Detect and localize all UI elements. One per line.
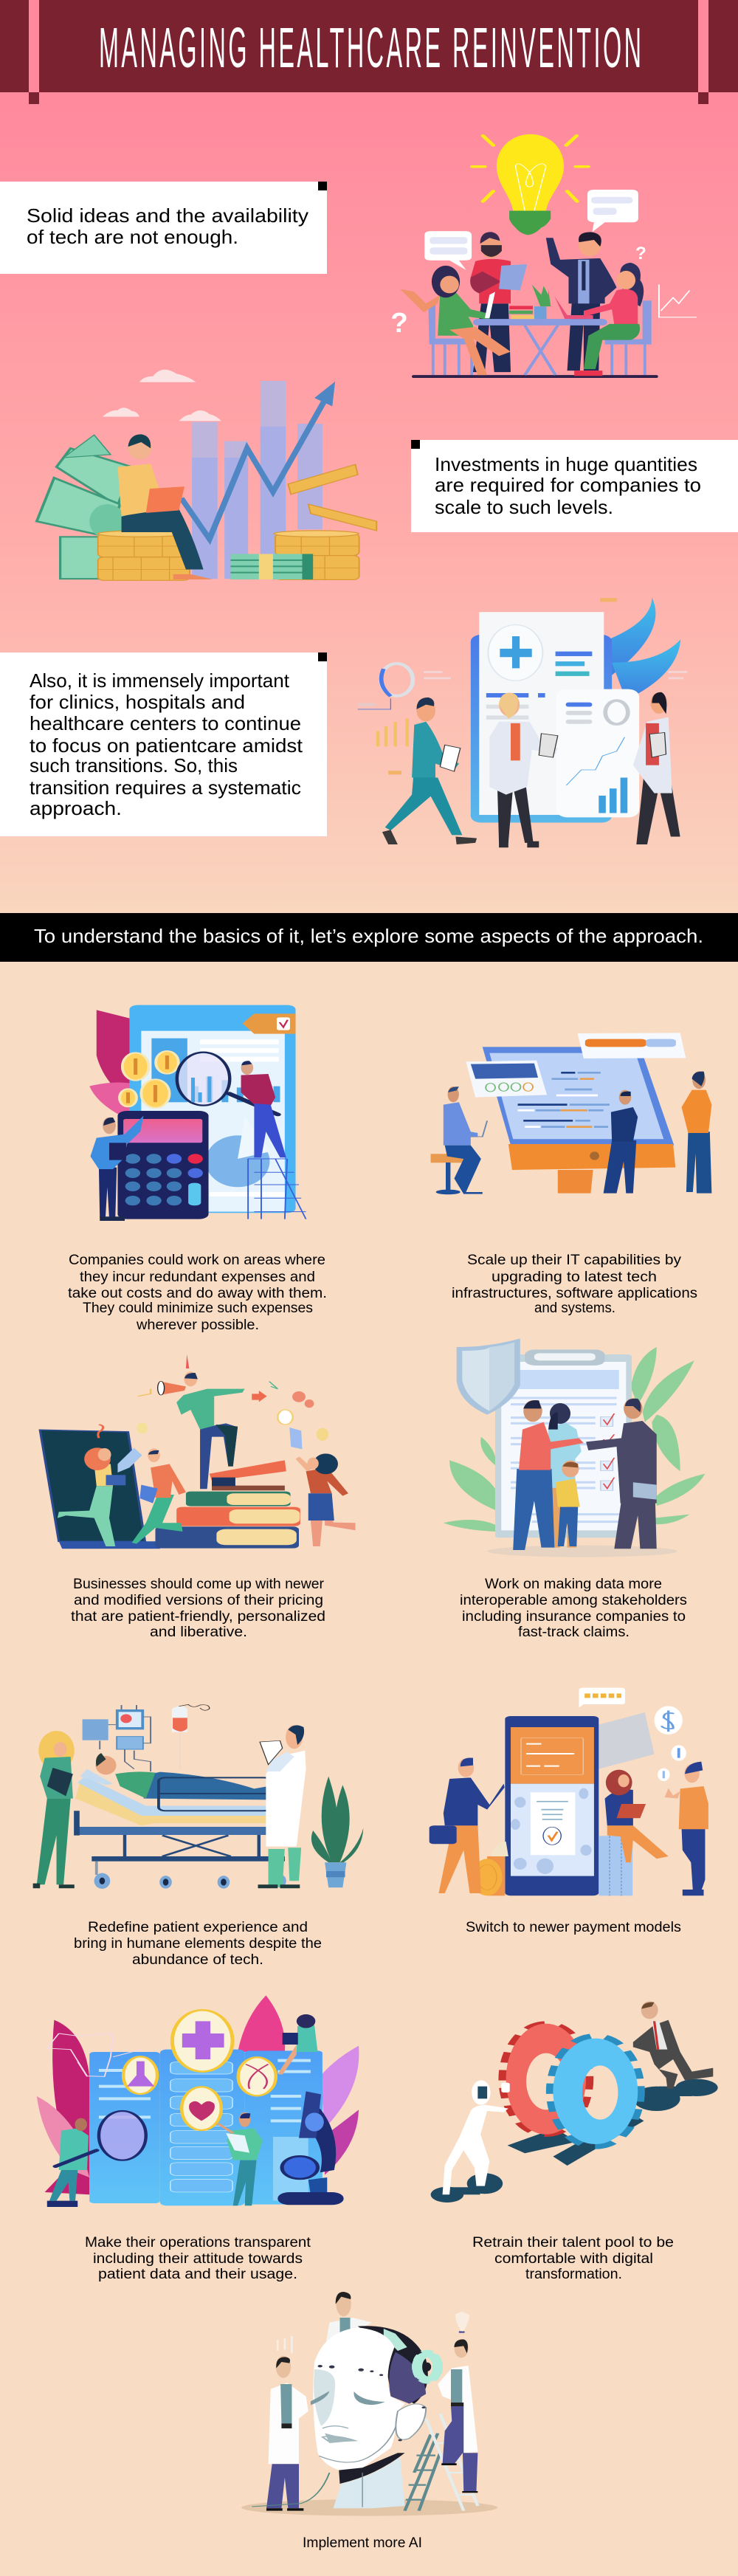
text box: solid ideas: of tech are not enough. — [27, 226, 238, 248]
caption: talent pool — [472, 2235, 674, 2282]
caption: pricing: that are patient-friendly, personalized — [71, 1609, 325, 1625]
illustration: robot and man turning gears — [431, 2001, 718, 2203]
board — [40, 1430, 160, 1549]
microscope — [277, 2091, 344, 2205]
ladders — [405, 2414, 477, 2511]
man pushing gear — [633, 2001, 713, 2089]
caption: talent pool: comfortable with digital — [494, 2251, 653, 2267]
woman doctor with blonde hair — [489, 693, 558, 847]
man with laptop — [117, 434, 213, 579]
stack of bills — [599, 1836, 632, 1895]
illustration: insurance handshake and clipboard — [444, 1338, 705, 1557]
dollar bubbles — [655, 1706, 686, 1781]
caption: interoperable data: including insurance companies to — [462, 1609, 686, 1625]
neck and collar — [334, 2453, 405, 2508]
man with magnifier on ladder — [241, 1061, 286, 1157]
floating cards — [466, 1033, 686, 1098]
caption: patient experience: abundance of tech. — [132, 1952, 263, 1968]
caption: pricing: and modified versions of their pricing — [74, 1593, 323, 1608]
right man — [682, 1071, 711, 1194]
tablet with charts — [129, 1005, 296, 1213]
man with briefcase — [430, 1757, 505, 1893]
man pointing — [218, 2112, 263, 2205]
speech bubbles — [424, 190, 638, 270]
middle man — [604, 1090, 638, 1194]
text box: also important: approach. — [30, 797, 122, 819]
text box: also important: to focus on patientcare amidst — [30, 734, 303, 757]
text box: also important — [0, 652, 327, 836]
illustration: monitor and IT team — [431, 1033, 711, 1194]
stack of books — [155, 1460, 300, 1549]
icon: medical badges — [123, 2010, 276, 2130]
left engineer — [252, 2336, 329, 2511]
caption: IT capabilities: and systems. — [534, 1301, 615, 1316]
doctor — [258, 1725, 306, 1888]
woman standing right — [665, 1762, 708, 1895]
caption: redundant expenses: they incur redundant expenses and — [80, 1270, 315, 1285]
text box: solid ideas: Solid ideas and the availability — [27, 204, 308, 227]
pink leaves — [89, 1010, 134, 1122]
header banner — [0, 0, 738, 104]
caption: talent pool: Retrain their talent pool to be — [472, 2235, 674, 2250]
potted plant — [311, 1777, 363, 1887]
caption: interoperable data: Work on making data more — [485, 1577, 662, 1592]
question marks and chart icon: ? — [390, 307, 408, 339]
illustration: team meeting under light bulb — [390, 134, 697, 378]
shield — [457, 1338, 520, 1415]
text box: investments: are required for companies to — [435, 474, 701, 496]
caption: pricing: and liberative. — [150, 1625, 247, 1640]
gear — [415, 2352, 440, 2382]
text box: investments: Investments in huge quantities — [435, 453, 697, 475]
caption: IT capabilities: infrastructures, software applications — [452, 1286, 697, 1301]
ground shadow — [241, 2499, 497, 2516]
shadow and leaves — [444, 1347, 705, 1557]
seated man with laptop — [431, 1086, 487, 1194]
clipboard — [495, 1349, 632, 1537]
woman running left — [58, 1447, 142, 1546]
magnifier and left man — [47, 2111, 146, 2207]
text box: also important: such transitions. So, this — [30, 754, 238, 776]
clouds — [103, 370, 221, 421]
red gear — [505, 2024, 587, 2135]
question marks and chart icon — [390, 244, 697, 339]
monitor — [483, 1047, 675, 1194]
man running centre — [132, 1448, 186, 1544]
bed — [74, 1777, 286, 1889]
businessman — [586, 1398, 657, 1549]
caption: interoperable data — [460, 1577, 687, 1640]
question marks and chart icon: ? — [635, 244, 646, 264]
caption: talent pool: transformation. — [525, 2267, 622, 2282]
robot — [443, 2080, 510, 2194]
woman with laptop — [277, 2014, 318, 2075]
banknotes — [37, 435, 132, 579]
patient — [80, 1753, 271, 1811]
ladder — [248, 1159, 306, 1219]
text box: also important: transition requires a systematic — [30, 776, 301, 799]
man with megaphone — [158, 1371, 245, 1489]
blue gear — [552, 2036, 638, 2146]
shadows — [431, 2079, 718, 2203]
caption: interoperable data: interoperable among stakeholders — [460, 1593, 687, 1608]
caption: patient experience — [74, 1920, 322, 1968]
seated woman — [605, 1770, 669, 1862]
cash bundle — [231, 554, 313, 579]
floating icons — [98, 1354, 328, 1441]
text box: investments: scale to such levels. — [435, 496, 613, 518]
robot face — [311, 2327, 426, 2473]
bar chart — [192, 381, 323, 579]
caption: transparency — [85, 2235, 311, 2282]
text box: solid ideas — [0, 182, 327, 274]
illustration: books, megaphone and team — [40, 1354, 356, 1549]
card and rating — [579, 1688, 655, 1769]
icon: light bulb — [472, 134, 588, 235]
caption: patient experience: Redefine patient experience and — [88, 1920, 308, 1935]
caption: IT capabilities: Scale up their IT capabilities by — [467, 1253, 682, 1268]
chairs and floor — [412, 300, 658, 378]
text box: also important: healthcare centers to continue — [30, 712, 301, 734]
man in teal scrubs — [382, 698, 477, 844]
caption: implement AI: Implement more AI — [303, 2535, 422, 2551]
illustration: man with laptop on coins and growth chart — [37, 370, 376, 580]
phone and documents — [471, 612, 639, 823]
calculator — [117, 1111, 209, 1219]
caption: interoperable data: fast-track claims. — [518, 1625, 630, 1640]
coin — [472, 1842, 508, 1895]
caption: patient experience: bring in humane elements despite the — [74, 1936, 322, 1952]
standing man in suit — [546, 232, 617, 371]
woman doctor with dark hair — [633, 692, 680, 844]
server panels — [89, 2050, 323, 2205]
growth arrow — [182, 382, 335, 539]
intro band — [0, 913, 738, 962]
title: MANAGING HEALTHCARE REINVENTION — [99, 16, 641, 80]
caption: transparency: Make their operations transparent — [85, 2235, 311, 2250]
table with plant and books — [473, 285, 607, 375]
caption: transparency: including their attitude towards — [93, 2251, 303, 2267]
magnifier — [177, 1053, 277, 1115]
caption: payment models: Switch to newer payment models — [466, 1920, 681, 1935]
leaves — [37, 1995, 359, 2194]
caption: IT capabilities — [452, 1253, 697, 1316]
illustration: hospital bed and patient — [33, 1704, 363, 1889]
caption: IT capabilities: upgrading to latest tech — [492, 1270, 657, 1285]
illustration: medical team with phone chart — [358, 597, 687, 847]
head back with gears — [358, 2326, 428, 2404]
seated woman right — [574, 263, 644, 376]
woman running right — [289, 1428, 356, 1546]
caption: transparency: patient data and their usage. — [98, 2267, 297, 2282]
standing bearded man — [470, 232, 527, 372]
text box: investments — [411, 440, 738, 532]
side data widgets — [358, 664, 687, 774]
icon: molecule — [47, 2033, 141, 2076]
illustration: transparent medical data — [37, 1995, 359, 2207]
caption: redundant expenses: take out costs and do away with them. — [68, 1286, 327, 1301]
nurse — [33, 1731, 75, 1888]
phone — [505, 1716, 599, 1895]
intro band: To understand the basics of it, let’s explore some aspects of the approach. — [34, 925, 703, 947]
family — [513, 1400, 584, 1550]
caption: pricing: Businesses should come up with newer — [73, 1577, 325, 1592]
caption: redundant expenses: Companies could work on areas where — [69, 1253, 325, 1268]
man at calculator — [90, 1116, 144, 1221]
monitors and IV — [83, 1704, 210, 1771]
text box: also important: Also, it is immensely important — [30, 669, 290, 692]
caption: redundant expenses — [68, 1253, 327, 1333]
caption: redundant expenses: wherever possible. — [136, 1318, 259, 1333]
caption: pricing — [71, 1577, 325, 1640]
top engineer — [325, 2292, 372, 2349]
coins — [120, 1051, 179, 1108]
seated woman left — [400, 266, 511, 375]
illustration: calculator and expenses — [89, 1005, 306, 1221]
illustration: mobile payments — [430, 1688, 708, 1895]
illustration: AI head with engineers — [241, 2292, 497, 2516]
text box: also important: for clinics, hospitals and — [30, 691, 245, 713]
coin stacks — [98, 464, 376, 580]
leaves — [600, 597, 680, 700]
caption: redundant expenses: They could minimize such expenses — [83, 1301, 313, 1316]
right engineer — [438, 2312, 477, 2493]
